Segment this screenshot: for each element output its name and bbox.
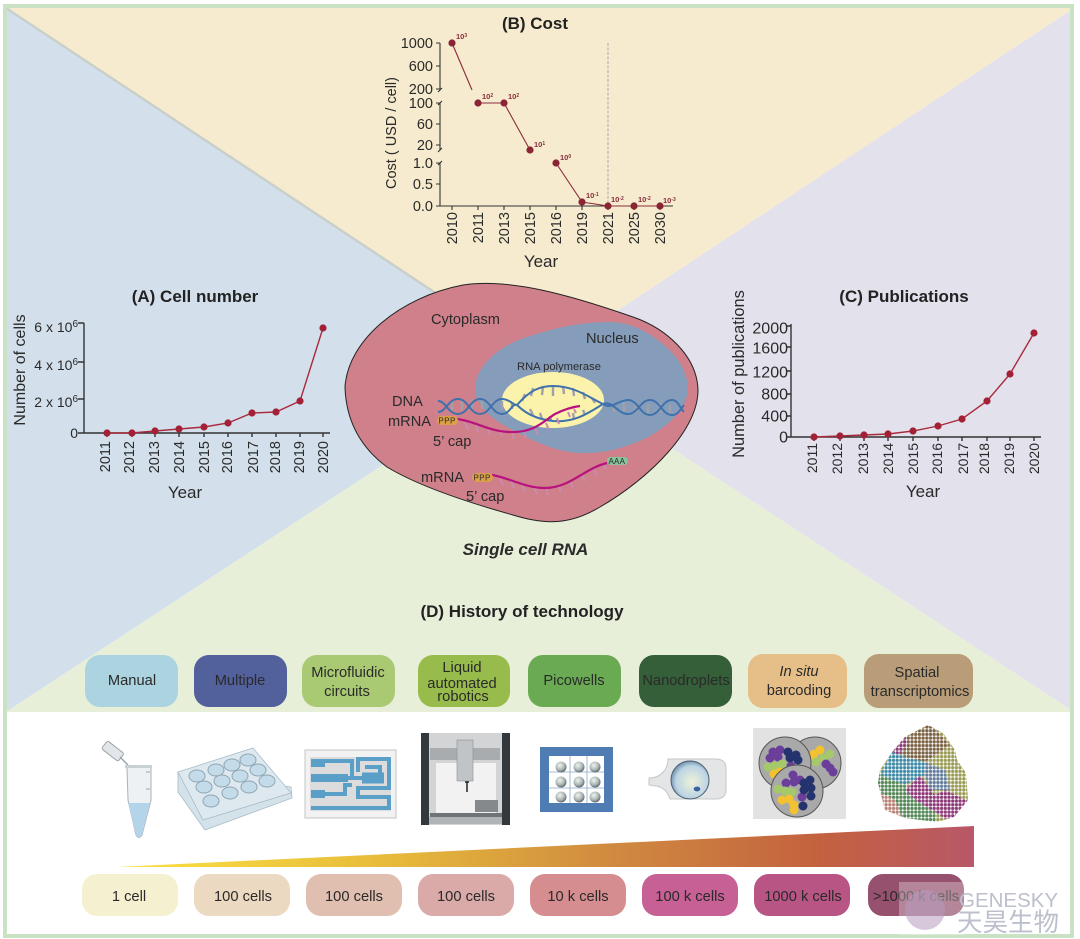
cell labels: mRNA: [421, 470, 464, 486]
pill: liquid automated robotics: automated: [427, 676, 497, 692]
icon: tube: [101, 741, 152, 838]
publications axis titles: [730, 290, 941, 501]
cost x tick labels: 2021: [601, 212, 617, 244]
icon: picowell array: [540, 747, 613, 812]
icon: liquid handling robot: [421, 733, 510, 825]
pill: manual: [85, 655, 178, 707]
pill: microfluidic circuits: Microfluidic: [311, 665, 385, 681]
DNA helix: [438, 386, 684, 421]
publications y labels: 0: [779, 430, 788, 446]
sector: cost: [6, 8, 1074, 362]
cost y tick labels: 60: [417, 117, 433, 133]
cell labels: 5’ cap: [433, 434, 471, 450]
heading: cost: (B) Cost: [502, 14, 568, 33]
icon: nanodroplet: [649, 759, 726, 799]
cell number x labels: 2015: [197, 441, 213, 473]
publications y labels: 2000: [752, 320, 788, 338]
publications y labels: 1600: [752, 340, 788, 358]
cell number x labels: 2016: [220, 441, 236, 473]
pill: 100 cells: 100 cells: [437, 889, 495, 905]
pill: liquid automated robotics: [418, 655, 510, 707]
cost x tick labels: 2010: [445, 212, 461, 244]
cost x tick labels: 2015: [523, 212, 539, 244]
icon: spatial transcriptomics spot map: [878, 725, 968, 822]
pill: picowells: Picowells: [543, 673, 605, 689]
cost y tick labels: 600: [409, 59, 433, 75]
cost value labels: 2: [516, 93, 519, 99]
heading: cell number: (A) Cell number: [132, 287, 259, 306]
cost value labels: 10: [534, 140, 542, 149]
cost y tick labels: [401, 36, 433, 215]
cost value labels: -1: [594, 192, 599, 198]
cost value labels: 10: [663, 196, 671, 205]
cost value labels: 3: [464, 33, 467, 39]
cost value labels: -3: [671, 197, 676, 203]
cell labels: mRNA: [388, 414, 431, 430]
publications x labels: 2013: [855, 443, 871, 474]
cell number series: [103, 324, 327, 437]
publications series: [810, 329, 1038, 441]
cell number y labels: 4 x 10: [34, 357, 72, 373]
panel A: cell number chart: [12, 287, 332, 502]
watermark: 天昊生物: [957, 909, 1059, 937]
cost value labels: [456, 32, 676, 205]
publications y labels: 400: [761, 408, 788, 426]
publications axis titles: Year: [906, 482, 941, 501]
cell number x labels: 2014: [172, 441, 188, 473]
cost x tick labels: 2013: [497, 212, 513, 244]
cell number y labels: 2 x 10: [34, 394, 72, 410]
sector: cell number: [6, 8, 540, 712]
pill: liquid automated robotics: robotics: [437, 689, 489, 705]
cell number x labels: 2019: [292, 441, 308, 473]
cost value labels: 1: [542, 141, 545, 147]
sector: history of technology: [6, 362, 1074, 712]
5' cap tags: PPP: [438, 416, 456, 426]
icon: well plate: [178, 748, 292, 830]
5' cap tags: PPP: [474, 474, 491, 482]
cost axes: [436, 43, 673, 210]
cost value labels: 0: [568, 154, 571, 160]
publications y labels: 800: [761, 386, 788, 404]
pill: 1000 k cells: 1000 k cells: [764, 889, 842, 905]
cell labels: RNA polymerase: [517, 361, 601, 373]
mature mRNA: [492, 463, 607, 495]
cost axis titles: Year: [524, 252, 559, 271]
cost value labels: -2: [619, 196, 624, 202]
publications x labels: 2016: [929, 443, 945, 474]
pill: over 1000 k cells: [868, 874, 964, 916]
publications x labels: 2019: [1001, 443, 1017, 474]
cost y tick labels: 1.0: [413, 156, 433, 172]
cost axis titles: [384, 77, 559, 271]
pill: 1 cell: [82, 874, 178, 916]
cost value labels: -2: [646, 196, 651, 202]
publications x labels: 2017: [955, 443, 971, 474]
cell labels: DNA: [392, 394, 423, 410]
RNA polymerase: [502, 372, 604, 428]
pill: liquid automated robotics: Liquid: [442, 660, 482, 676]
panel C: publications chart: [730, 287, 1042, 501]
publications x labels: 2020: [1026, 443, 1042, 474]
cell number y labels: 6: [72, 394, 78, 405]
cell number y labels: 6: [72, 357, 78, 368]
cost x tick labels: 2030: [653, 212, 669, 244]
cell number x labels: 2017: [246, 441, 262, 473]
pill: nanodroplets: Nanodroplets: [642, 673, 730, 689]
pill: 100 cells: [194, 874, 290, 916]
cell labels: Cytoplasm: [431, 312, 500, 328]
cell membrane and cytoplasm: [345, 283, 698, 522]
icon: microfluidic chip: [305, 750, 396, 818]
cost x tick labels: 2016: [549, 212, 565, 244]
cost x tick labels: [445, 212, 669, 244]
cost y tick labels: 0.5: [413, 177, 433, 193]
cost x tick labels: 2025: [627, 212, 643, 244]
pill: 100 cells: 100 cells: [325, 889, 383, 905]
scale gradient wedge: [117, 826, 974, 867]
watermark: [899, 882, 1059, 937]
publications x labels: 2012: [829, 443, 845, 474]
cost value labels: 10: [586, 191, 594, 200]
cell throughput pills: [82, 874, 964, 916]
publications x labels: 2015: [905, 443, 921, 474]
icon: in situ barcoding: [753, 728, 846, 819]
cost value labels: 10: [508, 92, 516, 101]
pill: over 1000 k cells: >1000 k cells: [873, 889, 959, 905]
pill: 100 cells: [306, 874, 402, 916]
cell number x labels: 2013: [147, 441, 163, 473]
cost axis titles: Cost ( USD / cell): [384, 77, 400, 189]
publications y labels: [752, 320, 788, 446]
pill: 10 k cells: [530, 874, 626, 916]
caption: single cell RNA: Single cell RNA: [463, 540, 588, 559]
pill: in situ barcoding: In situ: [779, 664, 819, 680]
white technology panel: [8, 712, 1072, 935]
cell labels: [388, 312, 639, 505]
pill: 100 cells: [418, 874, 514, 916]
pill: in situ barcoding: [748, 654, 847, 708]
cost y tick labels: 200: [409, 82, 433, 98]
cell labels: Nucleus: [586, 331, 639, 347]
cell number x labels: 2012: [122, 441, 138, 473]
publications axis titles: Number of publications: [730, 290, 748, 458]
cell number axis titles: [12, 314, 203, 502]
cell number y labels: 0: [70, 425, 78, 441]
cost y tick labels: 1000: [401, 36, 433, 52]
cell number axes: [78, 323, 330, 437]
cell number y labels: [34, 319, 78, 441]
poly-A tag: AAA: [608, 457, 626, 466]
publications axes: [786, 324, 1041, 441]
publications x labels: 2011: [804, 443, 820, 473]
technology pills: [85, 654, 973, 708]
icons row: [101, 722, 971, 838]
cell number y labels: 6 x 10: [34, 319, 72, 335]
pill: picowells: [528, 655, 621, 707]
projection divider: [607, 43, 609, 206]
publications y labels: 1200: [752, 364, 788, 382]
panel B: cost chart: [384, 14, 676, 271]
pill: multiple: Multiple: [215, 673, 265, 689]
pill: in situ barcoding: barcoding: [767, 683, 831, 699]
publications x labels: 2018: [976, 443, 992, 474]
5' cap tags: [437, 416, 493, 482]
cell number x labels: 2018: [268, 441, 284, 473]
cell number x labels: 2020: [316, 441, 332, 473]
pill: 1000 k cells: [754, 874, 850, 916]
central cell diagram: [345, 283, 698, 522]
sector edge shadow: [6, 8, 440, 296]
cost x tick labels: 2019: [575, 212, 591, 244]
mRNA in nucleus: [457, 406, 580, 439]
cost x tick labels: 2011: [471, 212, 487, 243]
nucleus: [475, 322, 688, 453]
pill: spatial transcriptomics: transcriptomics: [871, 684, 969, 700]
cost value labels: 10: [611, 195, 619, 204]
cell number axis titles: Number of cells: [12, 314, 29, 426]
cell number y labels: 6: [72, 319, 78, 330]
cell number x labels: 2011: [98, 441, 114, 472]
pill: spatial transcriptomics: [864, 654, 973, 708]
pill: microfluidic circuits: [302, 655, 395, 707]
watermark: GENESKY: [959, 889, 1058, 912]
cost value labels: 10: [482, 92, 490, 101]
publications x labels: 2014: [880, 443, 896, 474]
pill: 100 cells: 100 cells: [214, 889, 272, 905]
cell number axis titles: Year: [168, 483, 203, 502]
pill: manual: Manual: [108, 673, 156, 689]
heading: publications: (C) Publications: [839, 287, 969, 306]
pill: 100 k cells: [642, 874, 738, 916]
cost series: [448, 39, 664, 210]
pill: nanodroplets: [639, 655, 732, 707]
sector: publications: [540, 8, 1074, 712]
cost y tick labels: 20: [417, 138, 433, 154]
cost value labels: 10: [638, 195, 646, 204]
pill: multiple: [194, 655, 287, 707]
pill: spatial transcriptomics: Spatial: [895, 665, 939, 681]
pill: 10 k cells: 10 k cells: [547, 889, 609, 905]
publications x labels: [804, 443, 1042, 474]
cost value labels: 10: [560, 153, 568, 162]
cell number x labels: [98, 441, 332, 473]
cost value labels: 10: [456, 32, 464, 41]
pill: microfluidic circuits: circuits: [324, 684, 370, 700]
cost value labels: 2: [490, 93, 493, 99]
heading: history of technology: (D) History of technology: [420, 602, 624, 621]
cost y tick labels: 100: [409, 96, 433, 112]
cost y tick labels: 0.0: [413, 199, 433, 215]
cell labels: 5’ cap: [466, 489, 504, 505]
pill: 100 k cells: 100 k cells: [655, 889, 725, 905]
pill: 1 cell: 1 cell: [112, 889, 146, 905]
